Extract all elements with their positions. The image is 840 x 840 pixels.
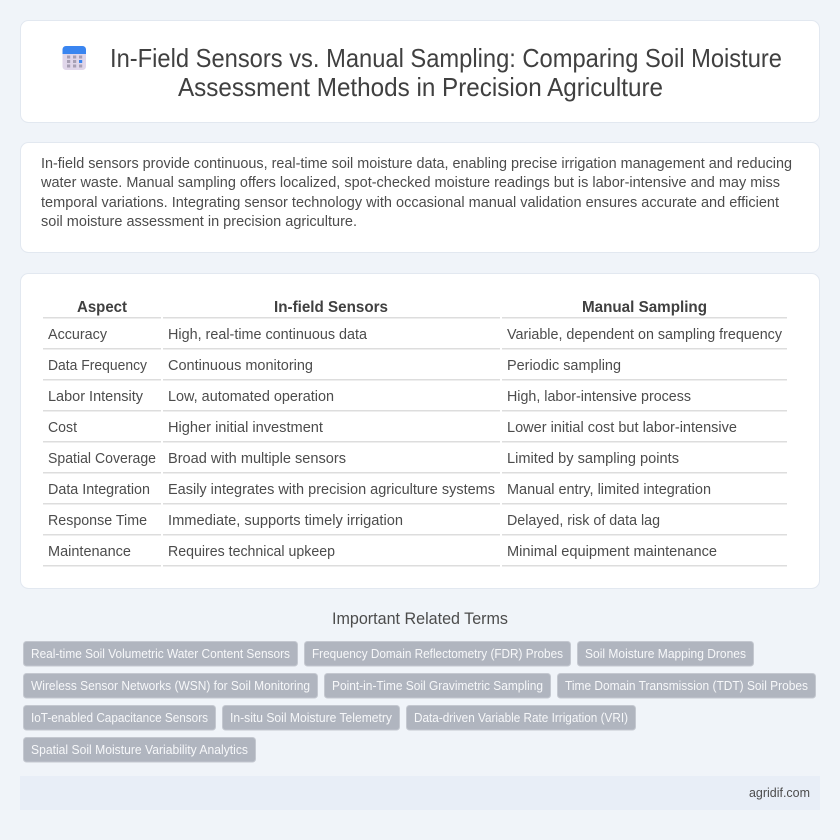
table header: Manual Sampling: [582, 299, 707, 316]
title: [110, 45, 782, 102]
row: response time: Immediate, supports timely irrigation: [168, 513, 403, 529]
tag: [406, 706, 636, 730]
row: data integration: Data Integration: [48, 482, 150, 498]
row: maintenance: Maintenance: [48, 544, 131, 560]
row: cost: Lower initial cost but labor-intensive: [507, 420, 737, 436]
tag: [24, 738, 256, 762]
summary text: In-field sensors provide continuous, real-time soil moisture data, enabling precise irrigation management and reducing: [41, 156, 792, 172]
row: data frequency: Continuous monitoring: [168, 358, 313, 374]
tag: Wireless Sensor Networks (WSN) for Soil Monitoring: [31, 679, 310, 693]
summary text: [40, 156, 792, 230]
tag: [24, 674, 318, 698]
row: data integration: Manual entry, limited integration: [507, 482, 711, 498]
title: Assessment Methods in Precision Agriculture: [178, 74, 663, 102]
row: data frequency: [48, 358, 621, 374]
row: spatial coverage: Spatial Coverage: [48, 451, 156, 467]
tag: [558, 674, 816, 698]
row: spatial coverage: Limited by sampling points: [507, 451, 679, 467]
tag: Data-driven Variable Rate Irrigation (VRI): [414, 711, 628, 725]
tag: In-situ Soil Moisture Telemetry: [230, 711, 393, 725]
summary text: water waste. Manual sampling offers localized, spot-checked moisture readings but is labor-intensive and may miss: [40, 175, 780, 191]
row: maintenance: Minimal equipment maintenance: [507, 544, 717, 560]
row: labor intensity: Labor Intensity: [48, 389, 144, 405]
row: data frequency: Periodic sampling: [507, 358, 621, 374]
row: response time: Delayed, risk of data lag: [507, 513, 660, 529]
footer: agridif.com: [749, 785, 810, 800]
row: accuracy: High, real-time continuous data: [168, 327, 368, 343]
table header: In-field Sensors: [274, 299, 388, 316]
row: response time: Response Time: [48, 513, 147, 529]
row: response time: [48, 513, 660, 529]
row: cost: Higher initial investment: [168, 420, 323, 436]
row: data integration: Easily integrates with precision agriculture systems: [168, 482, 495, 498]
tag: [222, 706, 400, 730]
tag: IoT-enabled Capacitance Sensors: [31, 711, 208, 725]
icon: calendar: [62, 46, 86, 70]
summary text: soil moisture assessment in precision agriculture.: [41, 214, 357, 230]
row: data integration: [48, 482, 711, 498]
title: In-Field Sensors vs. Manual Sampling: Comparing Soil Moisture: [110, 45, 782, 73]
tag: Soil Moisture Mapping Drones: [585, 647, 746, 661]
table header: Aspect: [77, 299, 128, 316]
table header: [77, 299, 707, 316]
row: spatial coverage: [48, 451, 679, 467]
tag: [24, 642, 298, 666]
row: maintenance: Requires technical upkeep: [168, 544, 335, 560]
tag: [324, 674, 550, 698]
row: accuracy: Variable, dependent on sampling frequency: [507, 327, 783, 343]
panel: summary: [20, 142, 820, 252]
row: accuracy: [48, 327, 783, 343]
row: labor intensity: High, labor-intensive process: [507, 389, 691, 405]
related term tags: [24, 642, 816, 762]
row: labor intensity: [48, 389, 691, 405]
row: labor intensity: Low, automated operation: [168, 389, 334, 405]
tag: [304, 642, 570, 666]
row: data frequency: Data Frequency: [48, 358, 148, 374]
footer: [20, 776, 820, 810]
tag: Time Domain Transmission (TDT) Soil Probes: [565, 679, 808, 693]
heading: related terms: Important Related Terms: [332, 610, 508, 628]
row: spatial coverage: Broad with multiple sensors: [168, 451, 346, 467]
tag: [24, 706, 216, 730]
row: cost: Cost: [48, 420, 77, 436]
tag: Frequency Domain Reflectometry (FDR) Probes: [312, 647, 563, 661]
row: accuracy: Accuracy: [48, 327, 108, 343]
tag: [578, 642, 754, 666]
panel: comparison table: [20, 274, 820, 588]
panel: header: [20, 20, 820, 122]
row: cost: [48, 420, 737, 436]
tag: Real-time Soil Volumetric Water Content Sensors: [31, 647, 290, 661]
summary text: temporal variations. Integrating sensor technology with occasional manual validation ensures accurate and efficient: [41, 195, 779, 211]
tag: Point-in-Time Soil Gravimetric Sampling: [332, 679, 543, 693]
tag: Spatial Soil Moisture Variability Analytics: [31, 743, 248, 757]
row: maintenance: [48, 544, 717, 560]
